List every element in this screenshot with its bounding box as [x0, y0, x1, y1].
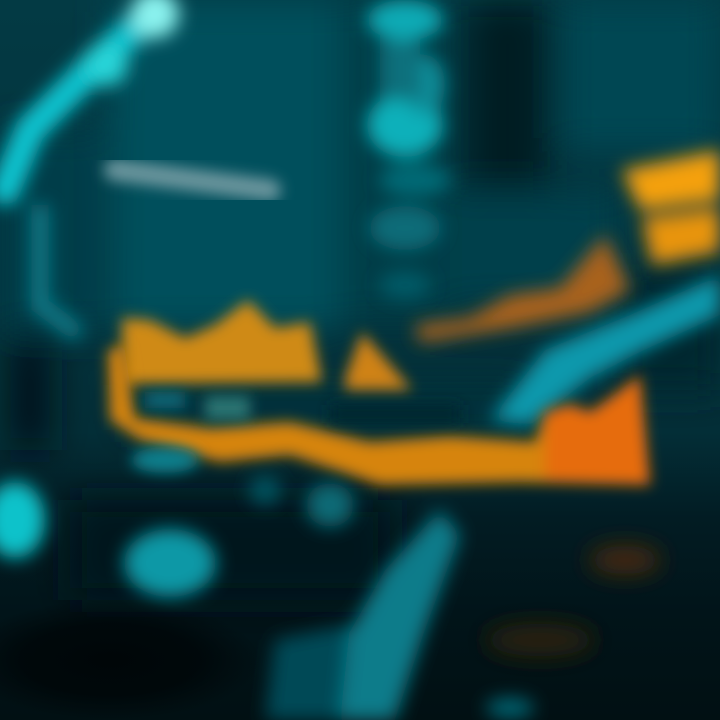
lower right dim orange glow — [485, 546, 661, 656]
heading smudge — [115, 170, 270, 190]
upper orange area — [122, 300, 412, 390]
inner teal chart details — [131, 392, 460, 473]
orange rising line — [415, 235, 630, 342]
teal rising band — [490, 275, 720, 425]
lower cyan shapes — [0, 475, 534, 720]
lower orange area — [108, 345, 650, 485]
dark corner shading — [0, 600, 260, 720]
upper left cyan diagonal — [5, 0, 179, 335]
upper right orange block — [622, 150, 720, 265]
central vertical cyan beads — [367, 0, 451, 299]
